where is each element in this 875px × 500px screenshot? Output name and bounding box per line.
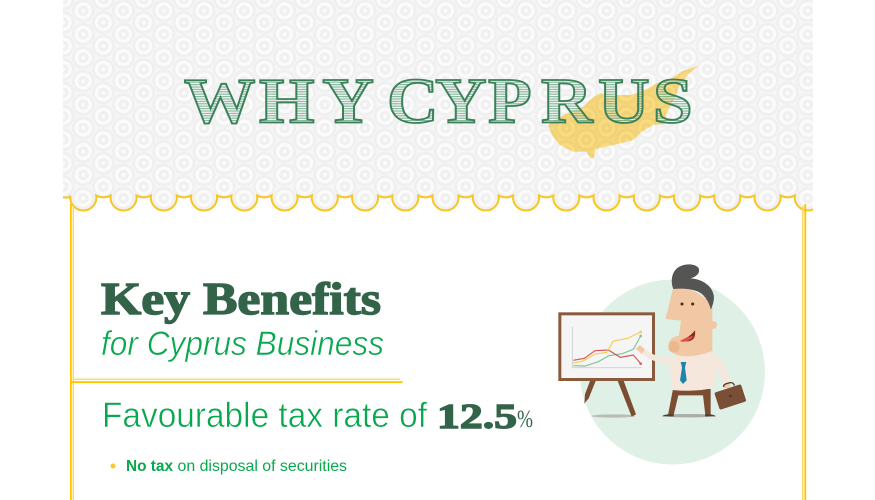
illustration background circle — [580, 280, 765, 464]
presentation board with chart — [560, 314, 653, 379]
frame: double yellow border — [70, 204, 806, 500]
icon: map of Cyprus — [548, 66, 698, 158]
man: hair — [672, 264, 714, 310]
scalloped yellow edge — [63, 196, 821, 210]
bullet: no tax on securities: No tax — [126, 458, 173, 475]
board easel legs — [584, 380, 636, 418]
man: shirt and arms — [636, 345, 730, 391]
illustration: presenter with chart — [560, 264, 765, 464]
heading: Key Benefits: Key Benefits — [101, 273, 381, 324]
man: tie — [680, 362, 687, 384]
subheading: for Cyprus Business: for Cyprus Business — [101, 325, 384, 363]
title: WHY CYPRUS — [184, 64, 693, 137]
bullet: no tax on securities: on disposal of securities — [178, 458, 347, 475]
text: favourable tax rate: Favourable tax rate of — [102, 396, 427, 435]
tax rate figure: 12.5 — [437, 397, 517, 436]
percent sign: % — [517, 406, 533, 433]
man: legs and shadow — [662, 389, 716, 417]
icon: briefcase — [714, 383, 746, 410]
header: patterned banner — [63, 0, 813, 215]
man: head — [666, 288, 717, 356]
divider: double yellow rule — [71, 379, 402, 383]
